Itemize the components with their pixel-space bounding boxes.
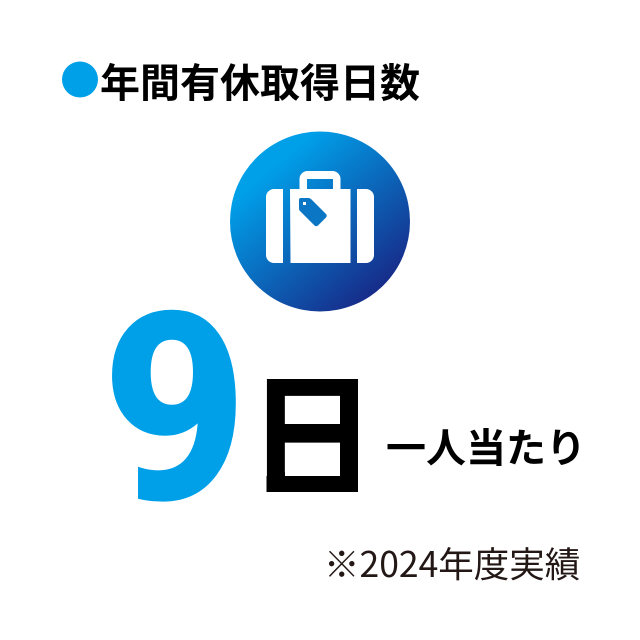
unit: day [266, 379, 358, 492]
big number 9: 9 [101, 263, 249, 559]
unit: day: 日 [248, 325, 377, 529]
icon: suitcase in gradient circle [230, 132, 410, 312]
per person label: 一人当たり [386, 416, 586, 474]
heading: annual paid leave days [62, 51, 420, 109]
icon: luggage tag [299, 198, 327, 226]
heading bullet [62, 62, 98, 98]
footnote: FY2024 actual: ※2024年度実績 [324, 537, 580, 588]
heading text: 年間有休取得日数 [100, 51, 420, 109]
